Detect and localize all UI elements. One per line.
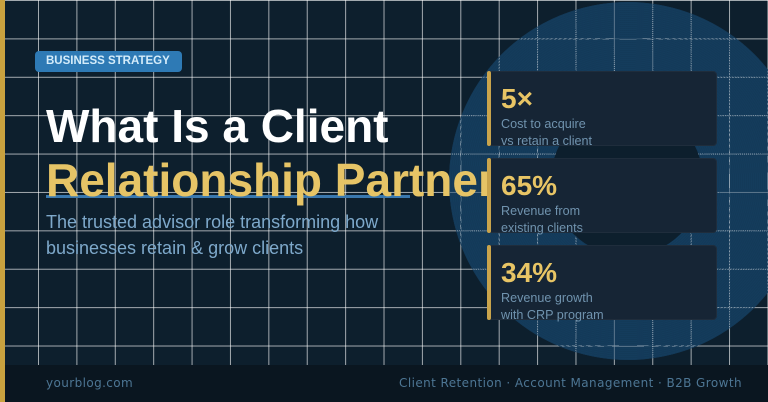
stat card: 34% growth: with CRP program [501, 308, 604, 322]
subtitle: businesses retain & grow clients [46, 238, 303, 258]
stat card: 65% revenue: existing clients [501, 220, 583, 234]
badge: business strategy: BUSINESS STRATEGY [46, 55, 170, 67]
left accent bar [0, 0, 5, 402]
footer [0, 365, 768, 402]
subtitle [46, 212, 378, 258]
stat card: 34% growth [487, 245, 717, 320]
footer: Client Retention · Account Management · B2B Growth [399, 376, 742, 390]
title [46, 100, 496, 206]
stat card: 5x cost [487, 71, 717, 146]
stat card: 65% revenue: 65% [501, 170, 557, 201]
footer: yourblog.com [46, 376, 133, 390]
stat card: 65% revenue: Revenue from [501, 204, 580, 218]
title: What Is a Client [46, 100, 388, 152]
title: Relationship Partner [46, 154, 496, 206]
stat card: 34% growth: Revenue growth [501, 291, 593, 305]
title underline [46, 195, 410, 198]
stat card: 34% growth: 34% [501, 257, 557, 288]
stat card: 5x cost: 5× [501, 83, 533, 114]
badge: business strategy [35, 51, 182, 72]
stat card: 65% revenue [487, 158, 717, 233]
stat card: 5x cost: vs retain a client [501, 134, 592, 148]
stat card: 5x cost: Cost to acquire [501, 117, 586, 131]
subtitle: The trusted advisor role transforming how [46, 212, 378, 232]
background circle [449, 2, 768, 360]
